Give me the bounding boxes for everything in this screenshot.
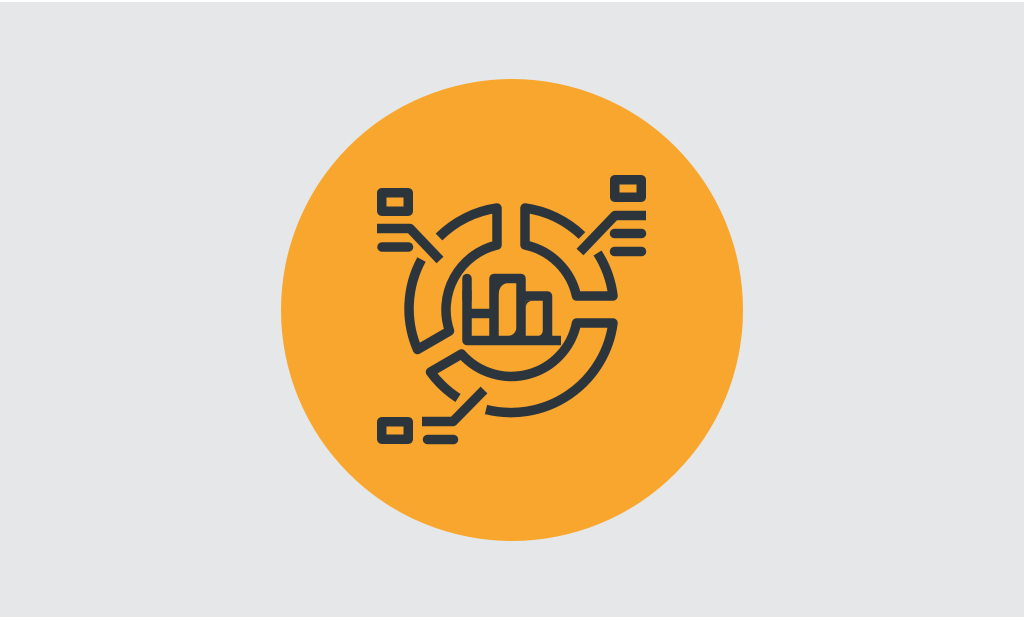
text line 1 bbox=[614, 229, 642, 238]
callout: top left bbox=[377, 193, 440, 260]
text line bbox=[428, 435, 454, 444]
connector line bbox=[422, 390, 484, 422]
callout: top right bbox=[580, 180, 646, 252]
bar 2 bbox=[494, 278, 521, 340]
bar 1 bbox=[467, 309, 494, 318]
text line bbox=[382, 242, 408, 252]
orange circle bbox=[281, 79, 743, 541]
bar chart in centre bbox=[467, 278, 561, 340]
icon: analytics donut chart bbox=[377, 180, 646, 440]
text line 2 bbox=[614, 247, 642, 256]
connector line bbox=[377, 228, 440, 260]
callout box bbox=[382, 422, 408, 439]
callout box bbox=[382, 193, 408, 211]
bar interior fillets bbox=[498, 283, 543, 336]
donut segment: top right bbox=[525, 208, 613, 296]
bar 3 bbox=[521, 296, 548, 340]
donut segment: bottom bbox=[430, 323, 613, 413]
bar chart axes bbox=[467, 290, 561, 340]
callout: bottom left bbox=[382, 390, 484, 440]
callout box bbox=[615, 180, 641, 197]
connector line bbox=[580, 216, 646, 252]
donut segment: top left bbox=[409, 208, 497, 350]
bar chart axis cap bbox=[462, 278, 472, 300]
